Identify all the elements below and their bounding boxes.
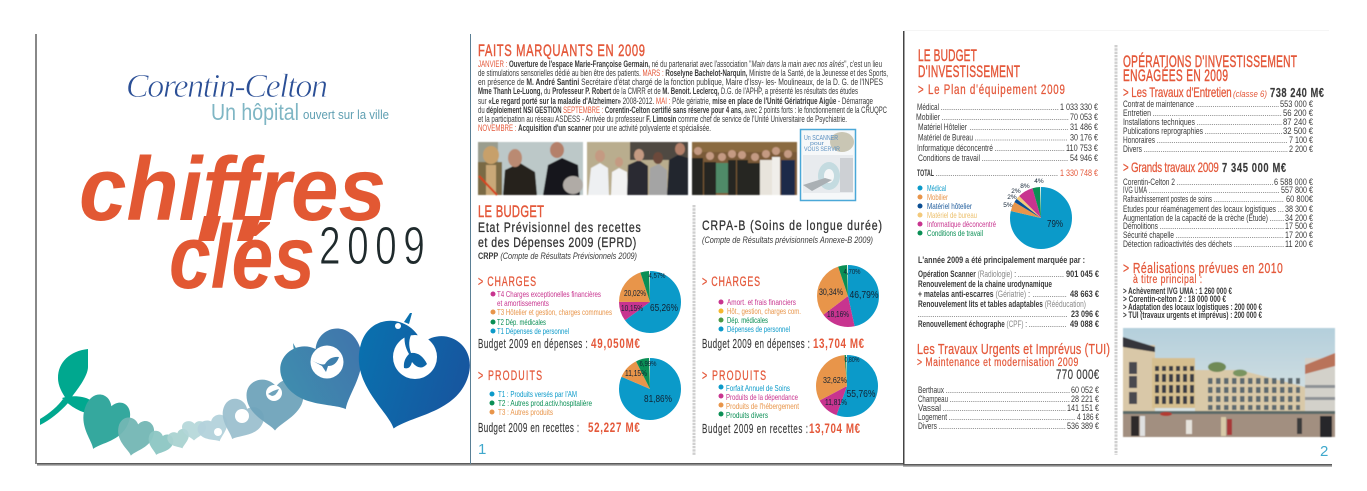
illustration: chain of hearts and sprout [40,313,477,459]
heading: (Compte de Résultats prévisionnels Annexe-B 2009) [702,235,873,245]
table: grands travaux: 11 200 € [1285,239,1313,249]
legend: produits: Produits de la dépendance [726,392,798,402]
text block: opérations marquantes: L'année 2009 a été principalement marquée par : [918,255,1085,265]
budget total: recettes [702,420,860,437]
table: plan d'équipement: 1 330 748 € [1060,168,1098,178]
legend: charges: T1 Dépenses de personnel [497,326,569,336]
title: chiffres clés: chiffres [79,140,386,240]
table: travaux d'entretien [1123,99,1313,154]
table: plan d'équipement: 110 753 € [1066,143,1098,153]
legend: charges: T4 Charges exceptionelles financières [497,289,601,299]
table: grands travaux: Sécurité chapelle [1123,230,1174,240]
table: grands travaux: 60 800€ [1286,194,1313,204]
subheading: grands travaux [1123,161,1287,175]
table: travaux d'entretien: 2 200 € [1289,144,1313,154]
title: chiffres clés: clés [169,208,315,308]
table: travaux d'entretien: 56 200 € [1283,108,1313,118]
heading: travaux urgents [917,340,1110,382]
heading: FAITS MARQUANTS EN 2009 [478,42,645,61]
table: grands travaux: 38 300 € [1285,204,1313,214]
legend: équipement: Matériel hôtelier [927,201,972,211]
subheading [478,220,641,261]
legend: produits [490,389,592,417]
subheading: travaux d'entretien: 738 240 M€ [1270,87,1325,100]
table: travaux urgents: 60 052 € [1071,385,1099,395]
pie chart: produits: 55,76% [846,388,876,400]
heading: charges: > CHARGES [478,275,536,290]
heading: travaux urgents: > Maintenance et modernisation 2009 [917,357,1078,369]
legend: produits: Forfait Annuel de Soins [726,383,790,393]
text block: opérations marquantes [918,255,1099,329]
pie chart: équipement [1003,178,1063,234]
text block: chronology: NOVEMBRE : Acquisition d'un scanner pour une activité polyvalente et spécialisée. [478,123,711,133]
heading: produits: > PRODUITS [702,369,766,384]
photo: building project [1123,328,1335,437]
heading: D'INVESTISSEMENT [918,61,1020,81]
pie chart: charges: 65,26% [650,302,678,314]
table: travaux urgents: 4 186 € [1077,412,1099,422]
legend: équipement: Mobilier [927,192,948,202]
legend: charges: T3 Hôtelier et gestion, charges communes [497,307,612,317]
text block: chronology: en présence de M. André Santini Secrétaire d'état chargé de la fonction publique, Maire d'Issy- les- Moulineaux, de la D. G. de l'INPES [478,77,883,87]
tagline [211,99,389,125]
year 2009: 2009 [319,215,425,275]
list: réalisations [1123,286,1262,320]
brochure: scanner: Un SCANNER [804,135,838,142]
heading: travaux urgents: Les Travaux Urgents et Imprévus (TUI) [917,340,1110,357]
table: plan d'équipement: 30 176 € [1070,132,1098,142]
text block: chronology [478,59,888,133]
table: plan d'équipement: Conditions de travail [918,153,980,163]
legend: charges [718,297,801,334]
panel: budget d'investissement [916,45,1110,431]
budget total: recettes: Budget 2009 en recettes : [702,422,808,437]
text block: chronology: Mme Thanh Le-Luong, du Professeur P. Robert de la CMRR et de M. Benoit. Leclercq, D.G. de l'APHP, a présenté les résultats des études [478,86,858,96]
text block: opérations marquantes: 48 663 € [1070,289,1099,299]
table: travaux d'entretien: Divers [1123,144,1142,154]
table: travaux urgents [918,385,1099,431]
subheading: grands travaux: > Grands travaux 2009 [1123,161,1219,175]
table: grands travaux: Démolitions [1123,221,1158,231]
table: plan d'équipement [916,102,1098,178]
pie chart: produits [625,359,672,405]
pie chart: produits: 81,86% [644,393,672,405]
brochure: scanner: pour [810,141,824,147]
table: grands travaux: Détection radioactivités des déchets [1123,239,1232,249]
table: grands travaux: Corentin-Celton 2 [1123,177,1175,187]
legend: équipement [918,183,996,238]
heading: OPÉRATIONS D'INVESTISSEMENT [1123,51,1297,71]
subheading: et des Dépenses 2009 (EPRD) [478,235,636,250]
text block: chronology: JANVIER : Ouverture de l'espace Marie-Françoise Germain, né du partenariat avec l'association "Main dans la main avec nos aînés", c'est un lieu [478,59,882,69]
page number 2: 2 [1320,443,1328,460]
pie chart: équipement: 2% [1011,188,1021,195]
budget total: dépenses [702,335,864,352]
table: grands travaux: 557 800 € [1281,185,1313,195]
table: travaux urgents: Vassal [918,403,941,413]
table: travaux urgents: 28 221 € [1071,394,1099,404]
budget total: dépenses: Budget 2009 en dépenses : [478,337,588,352]
heading: LE BUDGET [478,203,544,222]
list: réalisations: > Corentin-celton 2 : 18 000 000 € [1123,294,1226,304]
panel: cover [40,68,477,459]
table: plan d'équipement: Mobilier [916,112,940,122]
budget total: recettes: 13,704 M€ [809,420,860,436]
title: chiffres clés [79,140,386,308]
legend: charges: et amortissements [497,298,549,308]
text block: opérations marquantes: Renouvelement de la chaine urodynamique [918,279,1052,289]
heading: travaux urgents: 770 000€ [1056,368,1100,382]
pie chart: charges: 30,34% [819,287,843,298]
table: grands travaux: 34 200 € [1285,213,1313,223]
text block: opérations marquantes: Opération Scanner (Radiologie) : [918,269,1016,279]
legend: charges [490,289,612,336]
subheading: CRPP (Compte de Résultats Prévisionnels 2009) [478,251,637,261]
text block: opérations marquantes: Renouvellement échographe (CPF) : [918,319,1027,329]
photo: minister visit [587,142,688,195]
legend: produits [718,383,799,420]
legend: charges: Dép. médicales [727,315,768,325]
legend: charges: Amort. et frais financiers [727,297,796,307]
text block: opérations marquantes: Renouvelement lits et tables adaptables (Rééducation) [918,299,1086,309]
pie chart: équipement: 5% [1003,202,1013,209]
tagline: Un hôpital [211,99,299,125]
tagline: ouvert sur la ville [303,108,389,122]
table: grands travaux: Rafraichissement postes de soins [1123,194,1212,204]
table: plan d'équipement: 54 946 € [1070,153,1098,163]
brochure: scanner: VOUS SERVIR [804,146,840,153]
heading [702,218,882,245]
pie chart: produits: 11,15% [625,368,647,378]
legend: équipement: Médical [927,183,946,193]
table: grands travaux [1123,177,1313,249]
list: réalisations: > Achèvement IVG UMA : 1 260 000 € [1123,286,1232,296]
pie chart: produits: 6,99% [640,359,657,368]
budget total: dépenses [478,335,640,352]
budget total: dépenses: 13,704 M€ [813,335,864,351]
pie chart: charges: 4,57% [648,271,666,280]
table: travaux urgents: Berthaux [918,385,944,395]
table: grands travaux: IVG UMA [1123,185,1147,195]
legend: équipement: Matériel de bureau [927,210,977,220]
list: réalisations: > TUI (travaux urgents et imprévus) : 200 000 € [1123,310,1262,320]
heading: réalisations 2010: > Réalisations prévues en 2010 [1123,260,1283,276]
table: plan d'équipement: Matériel Hôtelier [918,122,967,132]
legend: produits: T2 : Autres prod.activ.hospitalière [498,398,592,408]
divider [1114,45,1118,455]
pie chart: équipement: 8% [1020,183,1030,190]
table: travaux d'entretien: Installations techniques [1123,117,1195,127]
budget total: dépenses: Budget 2009 en dépenses : [702,337,810,352]
table: plan d'équipement: Médical [917,102,939,112]
legend: produits: Produits divers [726,410,768,420]
budget total: recettes: Budget 2009 en recettes : [478,421,579,436]
table: travaux urgents: 536 389 € [1067,421,1099,431]
text block: chronology: de stimulations sensorielles dédié au bien être des patients. MARS : Roselyne Bachelot-Narquin, Ministre de la Santé, de la Jeunesse et des Sports, [478,68,888,78]
subheading: grands travaux: 7 345 000 M€ [1222,162,1287,175]
logo: Corentin-Celton signature: Corentin-Celton [126,68,328,105]
list: réalisations: > Adaptation des locaux logistiques : 200 000 € [1123,302,1262,312]
text block: opérations marquantes: + matelas anti-escarres (Gériatrie) : [918,289,1030,299]
heading: LE BUDGET [918,45,977,65]
pie chart: charges: 20,02% [624,288,646,298]
pie chart: charges: 46,79% [850,289,878,301]
text block: chronology: et la participation au réseau ASDESS - Arrivée du professeur F. Limosin comme chef de service de l'Unité Universitaire de Psychiatrie. [478,114,847,124]
table: travaux urgents: Logement [918,412,947,422]
table: travaux d'entretien: Entretien [1123,108,1151,118]
panel: le budget CRPP [478,203,678,458]
table: plan d'équipement: TOTAL [917,168,934,178]
table: plan d'équipement: 70 053 € [1070,112,1098,122]
panel: opérations d'investissement [1123,51,1335,460]
heading [1123,51,1297,85]
legend: charges: Dépenses de personnel [727,324,790,334]
photo: inauguration [478,142,583,195]
subheading: plan d'équipement: > Le Plan d'équipement 2009 [918,83,1065,97]
heading [918,45,1020,81]
legend: produits: T1 : Produits versés par l'AM [498,389,577,399]
heading: réalisations 2010: à titre principal : [1133,274,1202,286]
table: travaux urgents: Champeau [918,394,948,404]
subheading: travaux d'entretien: > Les Travaux d'Entretien [1123,86,1232,100]
panel: CRPA-B [702,218,882,437]
text block: chronology: sur «Le regard porté sur la maladie d'Alzheimer» 2008-2012. MAI : Pôle gériatrie, mise en place de l'Unité Gériatrique Aigüe - Démarrage [478,96,873,106]
page number 1: 1 [478,441,486,458]
budget total: recettes [478,419,640,436]
table: travaux d'entretien: Honoraires [1123,135,1155,145]
table: travaux urgents: Divers [918,421,937,431]
table: grands travaux: Augmentation de la capacité de la crèche (Etude) [1123,213,1268,223]
text block: chronology: du déploiement NSI GESTION SEPTEMBRE : Corentin-Celton certifié sans réserve pour 4 ans, avec 2 points forts : le fonctionnement de la CRUQPC [478,105,887,115]
legend: charges: T2 Dép. médicales [497,317,546,327]
heading: charges: > CHARGES [702,275,760,290]
heading: CRPA-B (Soins de longue durée) [702,218,882,233]
table: grands travaux: 6 588 000 € [1274,177,1313,187]
table: grands travaux: Etudes pour réaménagement des locaux logistiques [1123,204,1276,214]
legend: équipement: Informatique déconcentré [927,219,996,229]
budget total: dépenses: 49,050M€ [591,335,640,351]
heading: produits: > PRODUITS [478,369,542,384]
table: travaux d'entretien: 32 500 € [1283,126,1313,136]
table: plan d'équipement: 31 486 € [1070,122,1098,132]
divider [692,205,696,455]
legend: charges: Hôt., gestion, charges com. [727,306,801,316]
pie chart: charges [621,271,678,318]
legend: produits: T3 : Autres produits [498,407,553,417]
subheading: Etat Prévisionnel des recettes [478,220,641,235]
pie chart: produits [823,357,876,407]
pie chart: charges: 10,15% [621,303,643,313]
photo: group portrait [692,142,797,195]
brochure: scanner [800,130,856,200]
pie chart: charges: 18,16% [827,309,849,319]
icon: green sprout [40,349,99,425]
text block: opérations marquantes: 49 088 € [1070,319,1099,329]
table: travaux d'entretien: 553 000 € [1280,99,1313,109]
pie chart: produits: 0,80% [844,357,860,364]
legend: équipement: Conditions de travail [927,228,983,238]
pie chart: produits: 11,81% [825,397,847,407]
pie chart: produits: 32,62% [823,375,847,385]
table: travaux d'entretien: Publications reprographies [1123,126,1203,136]
table: travaux d'entretien: Contrat de maintenance [1123,99,1194,109]
pie chart: équipement: 2% [1007,194,1017,201]
heading: réalisations 2010 [1123,260,1283,286]
text block: opérations marquantes: 23 096 € [1071,309,1099,319]
pie chart: charges [819,267,878,319]
table: travaux d'entretien: 87 240 € [1283,117,1313,127]
pie chart: charges: 4,70% [844,267,861,276]
subheading: travaux d'entretien: (classe 6) [1233,89,1267,99]
budget total: recettes: 52,227 M€ [588,419,640,435]
pie chart: équipement: 79% [1047,219,1063,230]
table: travaux urgents: 141 151 € [1067,403,1099,413]
table: grands travaux: 17 200 € [1285,230,1313,240]
legend: produits: Produits de l'hébergement [726,401,799,411]
table: plan d'équipement: 1 033 330 € [1060,102,1098,112]
subheading: travaux d'entretien [1123,86,1325,100]
text block: opérations marquantes: 901 045 € [1066,269,1099,279]
heading: ENGAGÉES EN 2009 [1123,65,1228,85]
table: travaux d'entretien: 7 100 € [1289,135,1313,145]
table: grands travaux: 17 500 € [1285,221,1313,231]
pie chart: équipement: 4% [1034,178,1044,185]
table: plan d'équipement: Matériel de Bureau [918,132,973,142]
panel: faits marquants [478,42,888,200]
table: plan d'équipement: Informatique déconcentré [917,143,993,153]
